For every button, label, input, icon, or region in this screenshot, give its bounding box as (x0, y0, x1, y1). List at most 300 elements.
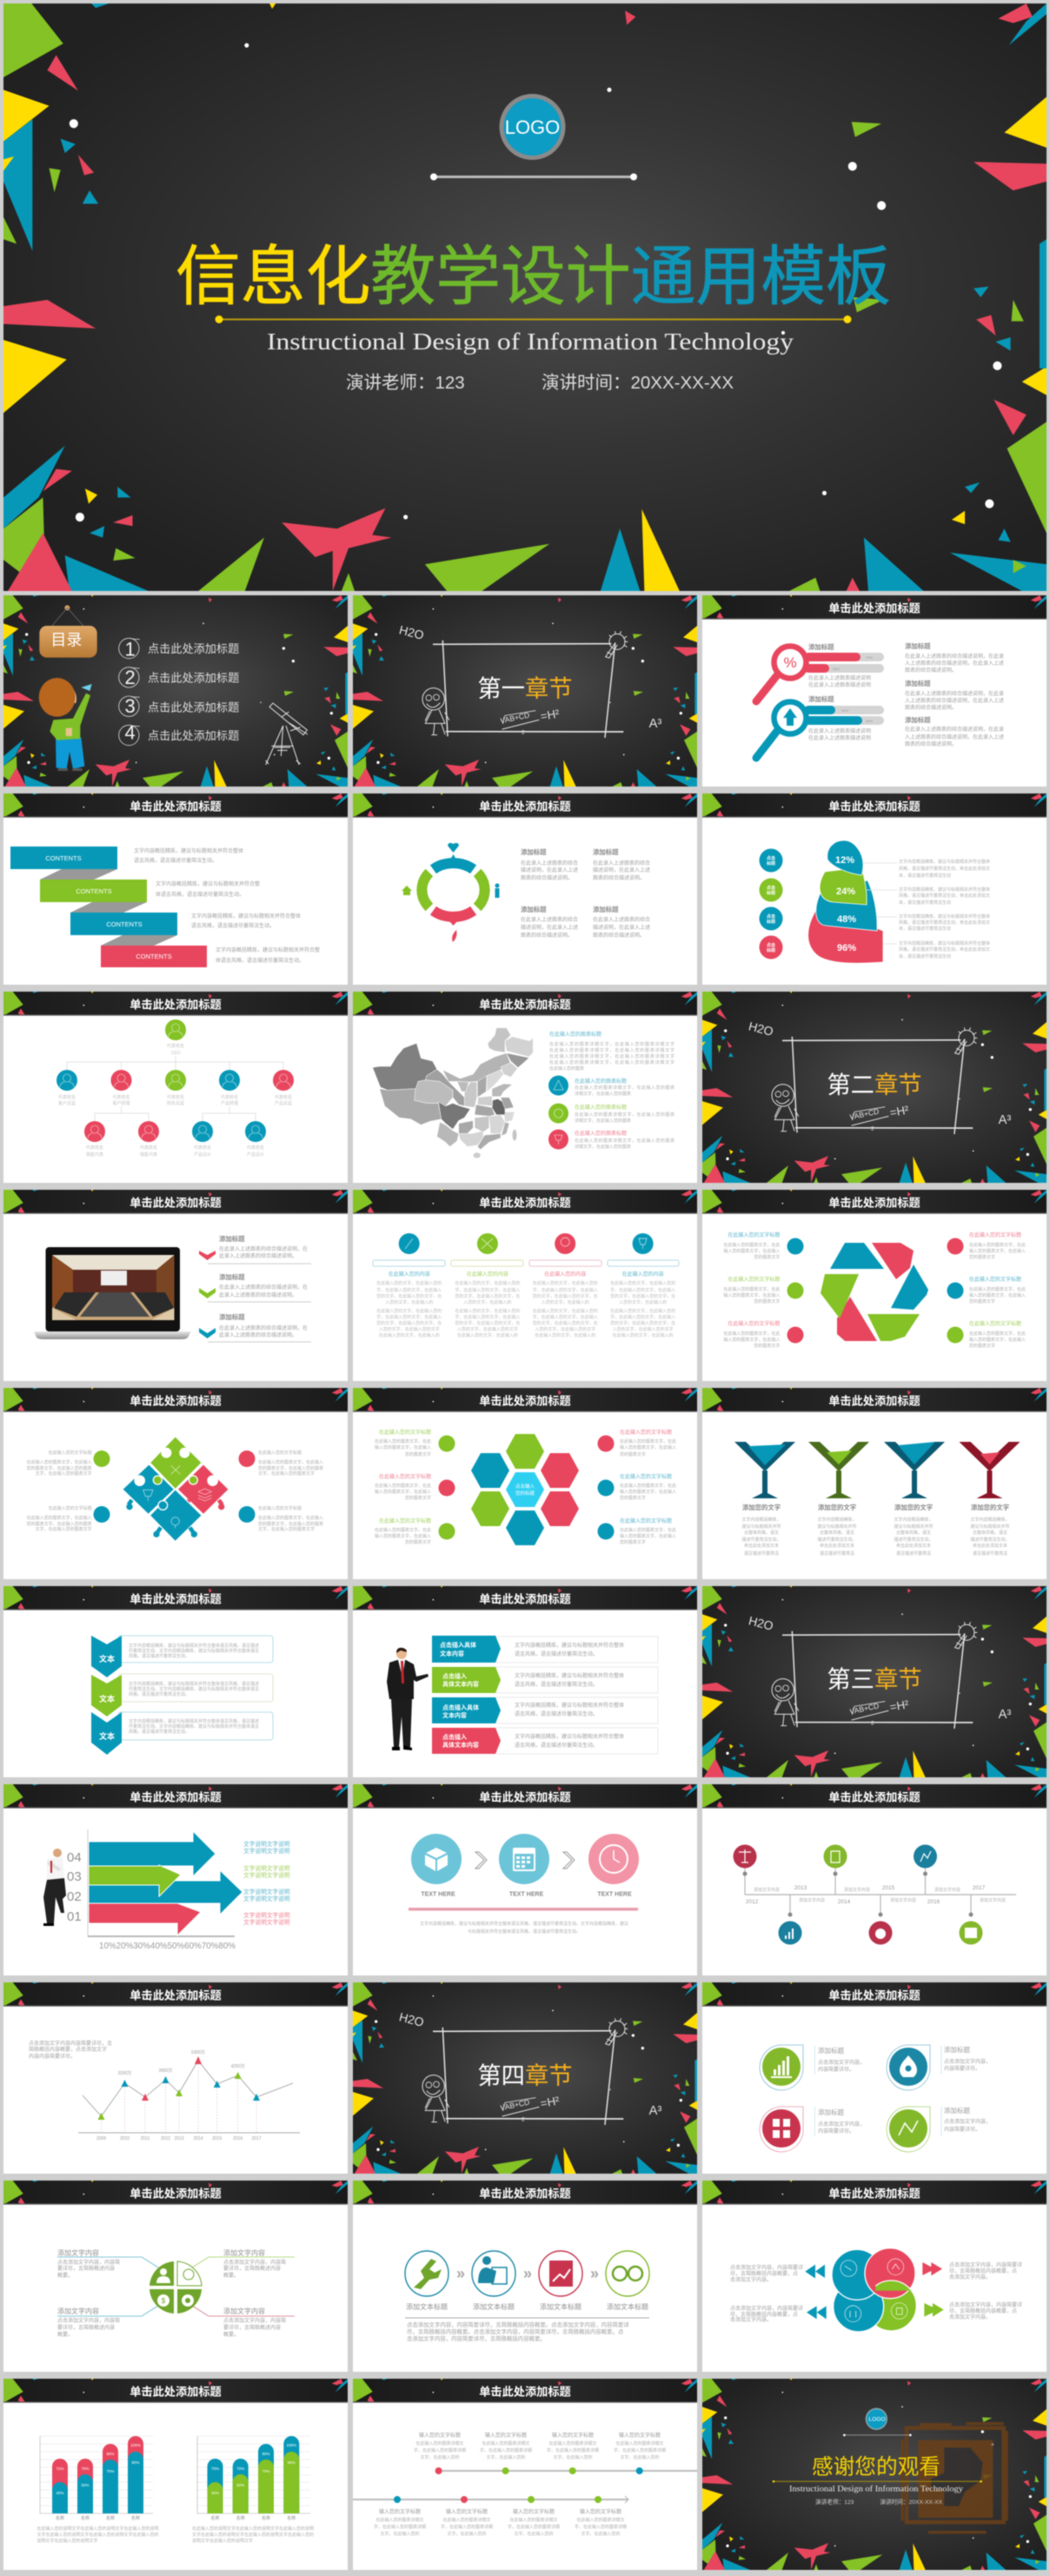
puzzle right text: 您的图表文字，在此输入您的图表 (258, 1521, 323, 1527)
column text: 在此输入您的文字，在此输入的 (535, 1332, 595, 1338)
text blocks: 添加标题 (521, 848, 547, 856)
puzzle right text: 在此输入您的图表文字，在此输入 (258, 1515, 323, 1521)
descriptions: 文字内容概括精炼，建议与标题相关并符合整体 (899, 886, 990, 893)
upper timeline text: 文字。在此输入您的 (420, 2454, 460, 2460)
text blocks beside magnifiers: 添加标题 (808, 643, 834, 651)
panel: martini glasses (702, 1388, 1047, 1579)
org labels: 代表姓名 (247, 1145, 264, 1151)
map legend items: 在此输入您的图表详细文字，在此输入您的图表 (575, 1112, 675, 1118)
check list: 添加标题 (219, 1235, 245, 1243)
arrow labels: 点击插入具体 (442, 1703, 479, 1711)
left labels: 您的图表文字 (754, 1254, 780, 1260)
left and right markers (788, 1238, 963, 1344)
left bar chart: 70% (106, 2469, 115, 2473)
row descriptions: 文字内容概括精炼，建议与标题相关并符合整体 (515, 1672, 624, 1679)
text column: 入上述图表的综合描述说明，在此录入上述 (905, 734, 1004, 740)
circle captions: TEXT HERE (509, 1891, 543, 1898)
column text: 在此输入您的文字，在此输入的 (457, 1332, 518, 1338)
bar descriptions: 文字在此输入您的说明文字在此输入您的说明文字在此输入您的 (192, 2532, 314, 2538)
lower timeline text: 输入您的文字标题 (446, 2508, 488, 2515)
slide heading: 单击此处添加标题 (130, 998, 222, 1012)
timeline years: 2015 (882, 1885, 895, 1891)
right labels: 在此输入您的图表文字，在此 (969, 1331, 1026, 1337)
org labels: 代表姓名 (140, 1145, 157, 1151)
step labels: 添加文本标题 (473, 2302, 515, 2311)
pink rule (409, 1908, 638, 1910)
chalk formula notes: 2 (522, 2116, 525, 2122)
chalk formula notes: √AB+CD (500, 2097, 530, 2112)
timeline axis (742, 1868, 1016, 1917)
text column: 在此录入上述图表的综合描述说明，在此录 (905, 726, 1004, 733)
column text: 入您的文字，在此输入您的文字 (535, 1326, 595, 1332)
bar descriptions: 文字在此输入您的说明文字在此输入您的说明文字在此输入您的 (37, 2532, 159, 2538)
org labels: 产品设计 (247, 1152, 264, 1158)
upper timeline text: 输入您的文字标题 (485, 2432, 527, 2439)
year labels: 2013 (174, 2136, 184, 2141)
text column: 图表的综合描述说明。 (905, 704, 957, 711)
puzzle left text: 在此输入您的文字标题 (49, 1450, 92, 1456)
badge text (814, 2045, 991, 2136)
check list: 此录入上述图表的综合描述说明。 (219, 1252, 297, 1259)
wooden sign: 目录 (50, 632, 82, 649)
lower timeline text (374, 2508, 627, 2537)
text blocks: 图表的综合描述说明。 (521, 932, 573, 939)
column headings: 在此输入您的内容 (622, 1271, 664, 1278)
honeycomb markers (438, 1436, 614, 1540)
chalk formula notes: A³ (649, 2104, 661, 2118)
chart intro text: 简赅概括内容概要，点击添加文字 (29, 2046, 107, 2053)
text blocks: 添加标题 (593, 906, 619, 913)
map legend items (548, 1076, 675, 1150)
panel: chapter one (353, 595, 697, 787)
text blocks beside magnifiers: 在此录入上述图表描述说明 (808, 734, 871, 741)
presenter and date: 演讲时间：20XX-XX-XX (880, 2498, 943, 2506)
badge text: 添加标题 (818, 2108, 844, 2116)
bar category labels: 名称 (210, 2515, 220, 2521)
drop percentages (835, 855, 856, 953)
descriptions: 语言风格，语言描述尽量简洁生动。 (134, 857, 217, 864)
bar category labels (56, 2515, 296, 2521)
puzzle left text: 在此输入您的图表文字，在此输入 (27, 1515, 92, 1521)
check list: 在此录入上述图表的综合描述说明，在 (219, 1284, 308, 1291)
chalk formula notes (398, 622, 661, 735)
slide heading: 单击此处添加标题 (828, 2187, 920, 2201)
column text: 字，在此输入您的文字，在此输入 (376, 1314, 442, 1320)
panel: puzzle (3, 1388, 348, 1579)
step labels: 添加文本标题 (406, 2302, 448, 2311)
contents list: 1 (125, 638, 136, 660)
column text: 在此输入您的文字，在此输入的 (379, 1332, 440, 1338)
quadrant text: 要详尽，言简赅概述内容 (223, 2324, 281, 2331)
bar category labels: 名称 (236, 2515, 245, 2521)
line chart (78, 2056, 300, 2133)
arrow labels: 点击插入具体 (440, 1641, 476, 1649)
quadrant text: 要详尽，言简赅概述内容 (57, 2324, 115, 2331)
centered description: 文字内容概括精炼，建议与标题相关并符合整体语言风格，语言描述尽量简洁生动。文字内容概括精炼，建议 (420, 1921, 628, 1927)
map description: 在此输入您的图表标题 (549, 1031, 601, 1038)
chalk frame and doodles (772, 1623, 977, 1728)
slide heading: 单击此处添加标题 (479, 1196, 571, 1210)
step description (407, 2320, 629, 2342)
small drop markers (760, 848, 782, 959)
puzzle left text: 您的图表文字，在此输入您的图表 (27, 1521, 92, 1527)
puzzle right text: 文字，在此输入您的图表文字 (258, 1526, 315, 1532)
panel: magnifier bars (702, 595, 1047, 787)
glass descriptions: 描述尽量简洁生动， (894, 1537, 934, 1543)
data labels: 5300万 (191, 2050, 205, 2055)
text blocks: 在此录入上述图表的综合 (593, 860, 650, 866)
timeline labels: 添加文字内容 (890, 1897, 916, 1903)
right labels: 在此输入您的文字标题 (969, 1276, 1021, 1283)
slide heading: 单击此处添加标题 (130, 1592, 222, 1606)
right labels: 您的图表文字 (969, 1343, 995, 1349)
honeycomb left text: 输入您的图表文字，在此输入 (375, 1489, 431, 1495)
descriptions: 体语言风格，语言描述尽量简洁生动。 (156, 891, 244, 898)
panel: bar charts (3, 2379, 348, 2570)
glass descriptions: 合整体风格，语言 (973, 1530, 1007, 1536)
text column: 入上述图表的综合描述说明，在此录入上述 (905, 697, 1004, 704)
text column (905, 642, 1004, 747)
glass headings: 添加您的文字 (971, 1504, 1009, 1511)
org labels: 代表姓名 (194, 1145, 211, 1151)
right labels: 输入您的图表文字，在此输入 (969, 1292, 1026, 1298)
arrow legend: 文字说明文字说明 (243, 1888, 290, 1895)
chart: red magnifier (756, 647, 884, 701)
slide heading: 单击此处添加标题 (130, 800, 222, 813)
step chevrons (456, 2265, 599, 2282)
arrow legend (243, 1840, 290, 1926)
card text: 风格，语言描述尽量简洁生动。 (129, 1691, 189, 1697)
ring segments (416, 854, 490, 926)
slide heading: 单击此处添加标题 (828, 1790, 920, 1804)
panel: double timeline (353, 2379, 697, 2570)
contents list: 点击此处添加标题 (148, 642, 239, 655)
left labels: 在此输入您的图表文字，在此 (723, 1331, 780, 1337)
panel: four badges (702, 1982, 1047, 2174)
descriptions (134, 847, 320, 964)
column text: 您的文字，在此输入您的文字，在 (610, 1320, 675, 1326)
column text: 入您的文字，在此输入的 (619, 1299, 667, 1305)
puzzle left text: 文字，在此输入您的图表文字 (36, 1471, 92, 1477)
slide heading: 单击此处添加标题 (130, 1790, 222, 1804)
bar descriptions: 在此输入您的说明文字在此输入您的说明文字在此输入您的说明 (37, 2526, 159, 2532)
left bar chart: 90% (106, 2452, 115, 2456)
presenter and date: 演讲老师：123 (346, 373, 465, 393)
map legend items: 详细文字，在此输入您的图表 (575, 1091, 631, 1097)
bar category labels: 名称 (262, 2515, 270, 2521)
panel: hexagon arrows (702, 1190, 1047, 1381)
data labels (117, 2050, 245, 2076)
org nodes (56, 1019, 294, 1142)
quadrant text: 点击添加文字内容，内容简 (57, 2317, 120, 2324)
column text: 您的文字，在此输入您的文字，在 (610, 1293, 675, 1299)
column headings: 在此输入您的内容 (467, 1271, 508, 1278)
org labels: 代表姓名 (86, 1145, 103, 1151)
lower timeline text: 在此输入您的图表详细文 (509, 2517, 558, 2523)
bar descriptions: 说明文字在此输入您的说明文字 (192, 2538, 253, 2544)
right labels: 输入您的图表文字，在此输入 (969, 1248, 1026, 1254)
card text: 尽量简洁生动。文字内容概括精炼，建议与标题相关并符合整体语言 (129, 1648, 259, 1654)
timeline tracks (353, 2467, 697, 2503)
upper timeline text: 字，在此输入您的图表详细 (547, 2447, 599, 2453)
presenter and date (346, 373, 734, 393)
lower timeline text: 字，在此输入您的图表详细 (508, 2524, 560, 2530)
honeycomb left text: 在此输入您的文字标题 (379, 1473, 431, 1480)
bar category labels: 名称 (131, 2515, 140, 2521)
honeycomb left text (375, 1429, 431, 1545)
glass charts (734, 1442, 1020, 1498)
column text: 您的文字，在此输入您的文字，在 (533, 1320, 598, 1326)
chalk formula notes: A³ (649, 717, 661, 731)
column text: 入您的文字，在此输入您的文字 (613, 1326, 674, 1332)
right bar chart: 70% (211, 2466, 219, 2471)
step labels (406, 2302, 648, 2311)
chart: red magnifier: 70% (866, 655, 873, 660)
slide heading: 单击此处添加标题 (130, 2187, 222, 2201)
chalk formula notes: √AB+CD (849, 1106, 880, 1121)
puzzle markers (94, 1451, 256, 1523)
chalk formula notes: 2 (522, 729, 525, 735)
drop percentages: 96% (837, 943, 856, 953)
text blocks: 在此录入上述图表的综合 (593, 916, 650, 923)
logo badge: LOGO (505, 116, 560, 138)
map legend items: 在此输入您的图表标题 (575, 1104, 627, 1111)
arrow labels: 文本内容 (440, 1650, 464, 1657)
descriptions: 风格，语言描述尽量简洁生动，单击此处添加文 (899, 946, 990, 953)
blob text: 尽，言简赅概括内容概要，点 (730, 2270, 798, 2277)
card text: 尽量简洁生动。文字内容概括精炼，建议与标题相关并符合整体语言 (129, 1723, 259, 1730)
chalk formula notes: =H² (540, 2094, 561, 2110)
chevrons between circles (475, 1852, 575, 1869)
arrow labels: 具体文本内容 (442, 1680, 479, 1688)
row descriptions (515, 1642, 624, 1749)
data labels: 3200万 (117, 2071, 132, 2076)
quadrant text: 添加文字内容 (223, 2248, 265, 2257)
card text: 文字内容概括精炼，建议与标题相关并符合整体语言风格，语言描述 (129, 1643, 259, 1649)
quadrant text: 概要。 (223, 2272, 239, 2279)
leader lines (57, 2257, 295, 2316)
text cards (118, 1636, 273, 1740)
glass descriptions: 语言描述尽量简洁 (896, 1550, 931, 1557)
column headings: 在此输入您的内容 (544, 1271, 586, 1278)
honeycomb right text: 在此输入您的文字标题 (620, 1517, 672, 1524)
blob text: 尽，言简赅概括内容概要，点 (949, 2267, 1017, 2274)
quadrant text: 点击添加文字内容，内容简 (223, 2317, 286, 2324)
chevrons: 文本 (99, 1654, 115, 1663)
column text: 您的文字，在此输入您的文字，在 (376, 1293, 442, 1299)
step rule (405, 2317, 649, 2319)
lower timeline text: 字，在此输入您的图表详细 (441, 2524, 493, 2530)
contents list: 点击此处添加标题 (148, 671, 239, 684)
small drop markers: 标题 (767, 919, 775, 925)
blob diagram (832, 2248, 916, 2332)
lower timeline text: 文字。在此输入您的 (581, 2531, 621, 2537)
check list (199, 1235, 311, 1342)
presenter and date: 演讲时间：20XX-XX-XX (542, 373, 734, 393)
text column: 图表的综合描述说明。 (905, 667, 957, 674)
upper timeline text: 字，在此输入您的图表详细 (614, 2447, 666, 2453)
stacked drop chart (808, 840, 883, 963)
text blocks: 描述说明，在此录入上述 (593, 866, 650, 873)
column text: 您的文字，在此输入您的文字，在 (533, 1293, 598, 1299)
card text: 文字内容概括精炼，建议与标题相关并符合整体语言风格，语言描述 (129, 1718, 259, 1724)
text blocks: 图表的综合描述说明。 (593, 874, 645, 881)
chalk frame and doodles (422, 632, 628, 737)
slide heading: 单击此处添加标题 (479, 1394, 571, 1408)
card text (129, 1643, 259, 1735)
column text: 您的文字，在此输入您的文字，在 (376, 1320, 442, 1326)
descriptions: 体语言风格，语言描述尽量简洁生动。 (216, 957, 304, 964)
chapter title: 第三章节 (827, 1665, 922, 1692)
quadrant text: 添加文字内容 (223, 2307, 265, 2315)
bar descriptions: 说明文字在此输入您的说明文字 (37, 2538, 98, 2544)
contents list (119, 638, 239, 746)
right labels: 您的图表文字 (969, 1254, 995, 1260)
small drop markers: 点击 (767, 855, 775, 861)
badge icons (762, 2048, 927, 2148)
panel: cover slide (3, 3, 1047, 591)
puzzle right text: 在此输入您的图表文字，在此输入 (258, 1459, 323, 1465)
chart: blue magnifier (756, 702, 884, 758)
chapter title: 第四章节 (477, 2061, 573, 2088)
circle captions: TEXT HERE (421, 1891, 455, 1898)
left labels: 在此输入您的文字标题 (728, 1232, 780, 1238)
hexagon cycle (821, 1243, 928, 1341)
row descriptions: 语言风格，语言描述尽量简洁生动。 (515, 1681, 598, 1688)
centered description: 与标题相关并符合整体语言风格，语言描述尽量简洁生动。 (468, 1929, 581, 1935)
data labels: 3900万 (158, 2068, 173, 2074)
honeycomb left text: 输入您的图表文字，在此输入 (375, 1444, 431, 1451)
slide heading: 单击此处添加标题 (479, 1592, 571, 1606)
lower timeline text: 输入您的文字标题 (513, 2508, 555, 2515)
slide heading: 单击此处添加标题 (828, 1196, 920, 1210)
text column: 在此录入上述图表的综合描述说明，在此录 (905, 653, 1004, 660)
right bar chart: 70% (262, 2469, 270, 2473)
centered description (420, 1921, 628, 1935)
arrow legend: 文字说明文字说明 (243, 1911, 290, 1919)
puzzle right text: 在此输入您的文字标题 (258, 1450, 302, 1456)
year labels: 2009 (96, 2136, 106, 2141)
card text: 文字内容概括精炼，建议与标题相关并符合整体语言风格，语言描述 (129, 1681, 259, 1687)
step description: 尽，言简赅概括内容概要。点击添加文字内容，内容简要详尽，言简赅概括内容概要。点 (407, 2327, 624, 2335)
arrow labels: 具体文本内容 (442, 1741, 479, 1749)
chapter title: 第二章节 (827, 1071, 922, 1098)
bar category labels: 名称 (106, 2515, 115, 2521)
arrows (89, 1831, 243, 1935)
timeline icons (734, 1844, 982, 1945)
upper timeline text: 在此输入您的图表详细文 (548, 2440, 597, 2447)
drop percentages: 48% (837, 914, 856, 925)
check list: 添加标题 (219, 1313, 245, 1321)
map description: 在此输入您的图表详细文字，在此输入您的图表详细文字 (549, 1041, 675, 1047)
upper timeline text: 输入您的文字标题 (419, 2432, 461, 2439)
panel: chapter three (702, 1586, 1047, 1777)
card text: 风格，语言描述尽量简洁生动。 (129, 1653, 189, 1659)
panel: four columns (353, 1190, 697, 1381)
text blocks: 描述说明，在此录入上述 (593, 924, 650, 931)
lower timeline text: 在此输入您的图表详细文 (576, 2517, 625, 2523)
blob text: 尽，言简赅概括内容概要，点 (949, 2307, 1017, 2314)
row descriptions: 文字内容概括精炼，建议与标题相关并符合整体 (515, 1642, 624, 1649)
percent axis labels: 10%20%30%40%50%60%70%80% (99, 1941, 236, 1951)
column icons (373, 1233, 679, 1266)
glass descriptions: 文字内容概括精炼， (970, 1517, 1010, 1523)
timeline labels (754, 1887, 1006, 1903)
puzzle left text: 在此输入您的文字标题 (49, 1505, 92, 1511)
right bar chart: 100% (287, 2443, 296, 2447)
timeline labels: 添加文字内容 (799, 1897, 825, 1903)
contents list: 2 (125, 667, 136, 688)
column text: 在此输入您的文字，在此输入您的 (376, 1280, 442, 1286)
panel: line chart (3, 1982, 348, 2174)
year labels (96, 2136, 262, 2141)
descriptions: 文字内容概括精炼，建议与标题相关并符合整体 (899, 859, 990, 865)
right labels: 在此输入您的图表文字，在此 (969, 1242, 1026, 1248)
column text: 入您的文字，在此输入的 (463, 1299, 511, 1305)
badge rings (760, 2045, 930, 2152)
right labels: 在此输入您的文字标题 (969, 1232, 1021, 1238)
panel: process steps (353, 2181, 697, 2372)
upper timeline text: 在此输入您的图表详细文 (482, 2440, 530, 2447)
map legend items: 在此输入您的图表详细文字，在此输入您的图表 (575, 1085, 675, 1091)
quadrant text: 点击添加文字内容，内容简 (223, 2259, 286, 2266)
panel: hexagon cluster (353, 1388, 697, 1579)
text column: 图表的综合描述说明。 (905, 740, 957, 747)
column text: 入您的文字，在此输入您的文字 (379, 1326, 440, 1332)
chart: red magnifier: 35% (833, 667, 840, 671)
puzzle right text: 您的图表文字，在此输入您的图表 (258, 1465, 323, 1471)
right bar chart: 90% (262, 2452, 270, 2456)
panel: quadrant circle (3, 2181, 348, 2372)
double arrows (805, 2262, 944, 2319)
descriptions: 风格，语言描述尽量简洁生动，单击此处添加文 (899, 920, 990, 926)
timeline years: 2016 (927, 1899, 940, 1905)
illustration: telescope (266, 703, 308, 765)
chapter title: 第一章节 (477, 674, 573, 701)
panel: chapter two (702, 992, 1047, 1183)
honeycomb right text: 您的图表文字 (620, 1539, 646, 1545)
chalk formula notes: H2O (398, 622, 425, 642)
org labels: 产品设计 (194, 1152, 211, 1158)
timeline labels: 添加文字内容 (844, 1887, 870, 1893)
column text: 入您的文字，在此输入的 (542, 1299, 589, 1305)
lower timeline text: 文字。在此输入您的 (447, 2531, 487, 2537)
contents list: 3 (125, 695, 136, 717)
right bar chart: 50% (236, 2483, 244, 2487)
map legend items: 详细文字，在此输入您的图表 (575, 1118, 631, 1124)
glass descriptions: 合整体风格，语言 (896, 1530, 931, 1536)
lower timeline text: 字，在此输入您的图表详细 (575, 2524, 627, 2530)
chalk formula notes (748, 1019, 1011, 1132)
column headings: 在此输入您的内容 (389, 1271, 430, 1278)
small drop markers: 点击 (767, 942, 775, 948)
text column: 添加标题 (905, 680, 931, 687)
glass descriptions: 单击此处添加文本 (973, 1543, 1007, 1549)
panel: ring diagram (353, 793, 697, 985)
illustration: leaning man (43, 1849, 66, 1926)
presenter and date: 演讲老师：123 (815, 2498, 854, 2506)
badge text: 内容简要详尽。 (944, 2065, 980, 2072)
year labels: 2011 (141, 2136, 150, 2141)
glass headings: 添加您的文字 (894, 1504, 933, 1511)
panel: interlocked blobs (702, 2181, 1047, 2372)
step labels: 添加文本标题 (540, 2302, 581, 2311)
timeline years: 2012 (746, 1899, 759, 1905)
small drop markers: 标题 (767, 947, 775, 953)
chart intro text: 点击添加文字内容内容简要详尽，言 (29, 2040, 112, 2047)
chalk formula notes: H2O (748, 1019, 774, 1039)
axis (88, 1829, 235, 1936)
